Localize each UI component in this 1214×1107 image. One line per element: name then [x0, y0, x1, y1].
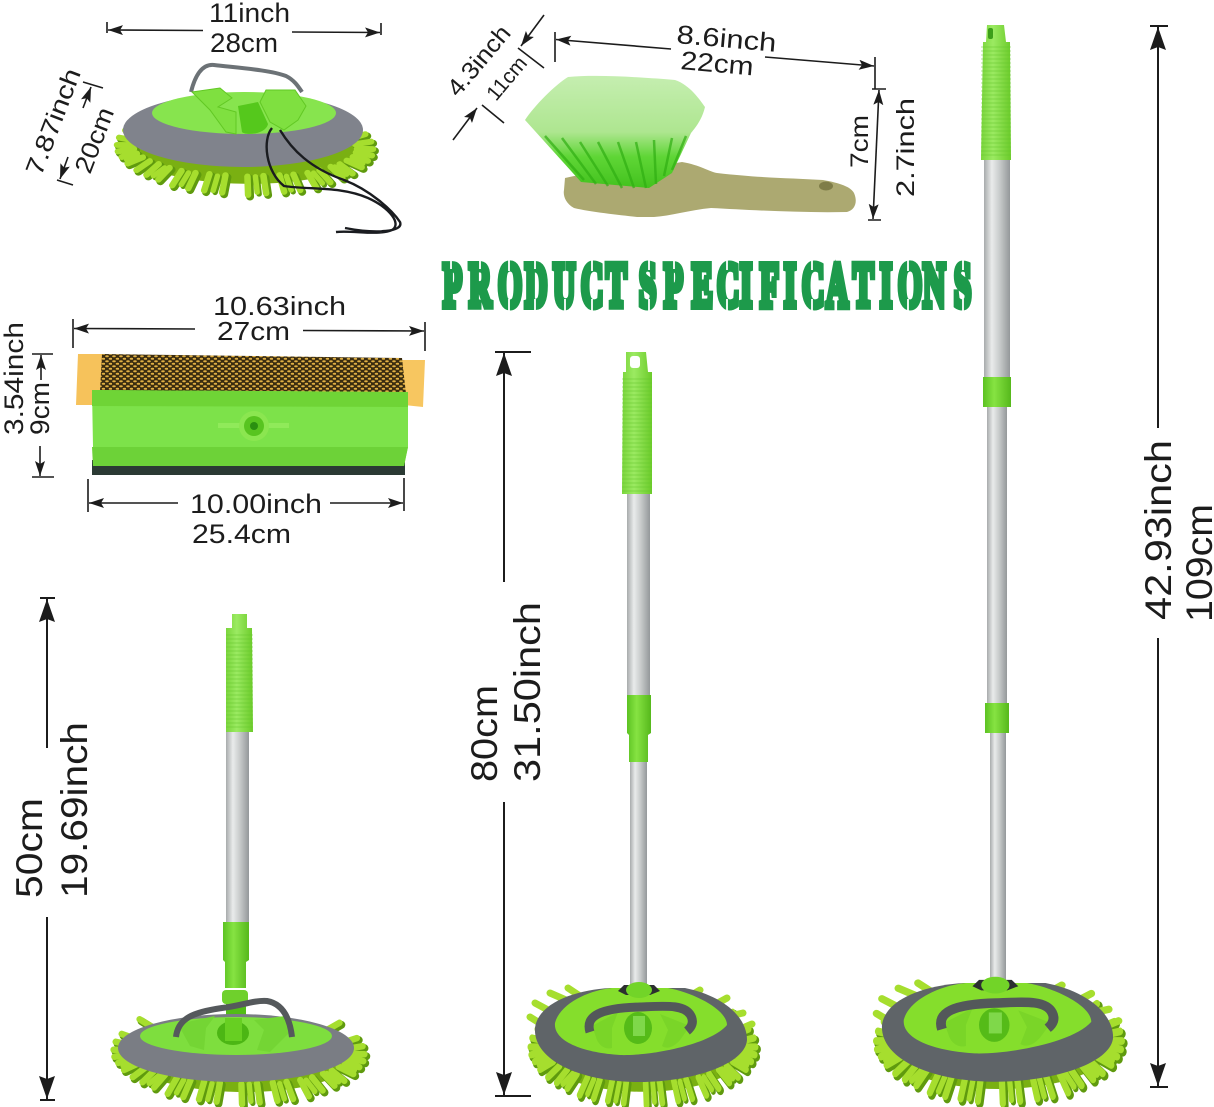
icon: socket stem: [225, 1018, 242, 1041]
icon: collar: [223, 922, 249, 988]
dimension: 80cm 31.50inch: 80cm: [464, 685, 505, 782]
icon: pole bottom: [990, 733, 1006, 985]
icon: green mop plate: [152, 92, 336, 134]
icon: pole lower: [630, 760, 647, 986]
icon: mop strap: [191, 65, 302, 92]
dimension: 4.3inch 11cm: [442, 15, 544, 140]
title: SPECIFICATIONS: [639, 250, 971, 320]
dimension: 50cm 19.69inch: 19.69inch: [54, 722, 95, 898]
title: [443, 250, 971, 320]
dimension: 50cm 19.69inch: 50cm: [9, 798, 50, 898]
icon: grey mop cover: [123, 93, 363, 167]
icon: mop head fringe: [116, 116, 376, 199]
icon: grip slot: [988, 28, 993, 39]
icon: handle hole: [819, 182, 833, 190]
icon: brush bristles: [525, 76, 705, 188]
icon: fringe: [530, 1012, 757, 1107]
icon: brush handle: [564, 162, 856, 217]
icon: fringe: [876, 1004, 1124, 1106]
dimension: 11inch 28cm: 28cm: [210, 28, 278, 58]
icon: body top shading: [92, 390, 408, 407]
dimension: 7.87inch 20cm: [20, 65, 120, 185]
dimension: 42.93inch 109cm: 42.93inch: [1138, 440, 1179, 620]
icon: connector knob: [218, 411, 289, 441]
icon: pole top: [984, 160, 1010, 378]
dimension: 50cm 19.69inch: [9, 598, 95, 1100]
icon: bristle streaks: [545, 136, 686, 188]
icon: mop socket: [238, 102, 268, 134]
dimension: 11inch 28cm: [107, 0, 381, 58]
dimension: 80cm 31.50inch: [464, 352, 548, 1096]
icon: mop head: [530, 982, 752, 1082]
dimension: 8.6inch 22cm: 22cm: [679, 45, 755, 81]
panel: squeegee head: [76, 354, 425, 475]
dimension: 7cm 2.7inch: [846, 89, 920, 220]
icon: right sponge: [400, 360, 425, 407]
dimension: 7cm 2.7inch: 2.7inch: [892, 98, 920, 197]
icon: pole silver: [226, 732, 249, 924]
icon: squeegee green body: [92, 390, 408, 466]
icon: grip: [622, 352, 652, 494]
icon: left sponge: [76, 354, 106, 405]
icon: clamps: [178, 1016, 292, 1052]
dimension: 42.93inch 109cm: [1138, 26, 1214, 1087]
dimension: 10.00inch 25.4cm: 10.00inch: [190, 489, 322, 519]
icon: squeegee rubber blade: [92, 460, 405, 475]
icon: grip: [226, 614, 253, 732]
icon: stem: [226, 1004, 246, 1044]
icon: pole middle: [987, 407, 1007, 704]
panel: long mop 109cm: [876, 25, 1124, 1106]
dimension: 7.87inch 20cm: 20cm: [69, 104, 120, 177]
dimension: 10.63inch 27cm: 10.63inch: [213, 291, 346, 321]
dimension: 8.6inch 22cm: [555, 19, 875, 89]
dimension: 7cm 2.7inch: 7cm: [846, 115, 874, 168]
dimension: 8.6inch 22cm: 8.6inch: [675, 19, 778, 58]
dimension: 10.63inch 27cm: [73, 291, 425, 351]
icon: socket: [217, 1021, 249, 1045]
dimension: 80cm 31.50inch: 31.50inch: [507, 602, 548, 782]
dimension: 10.00inch 25.4cm: 25.4cm: [192, 519, 291, 549]
icon: grip: [981, 25, 1011, 160]
icon: collar: [627, 695, 651, 762]
dimension: 10.63inch 27cm: 27cm: [217, 316, 290, 346]
icon: plate clamps: [192, 88, 306, 134]
icon: joint: [222, 990, 248, 1004]
panel: wheel brush: [525, 76, 856, 217]
icon: upper collar: [983, 377, 1011, 407]
dimension: 3.54inch 9cm: 9cm: [25, 382, 55, 435]
icon: grey cover: [118, 1014, 354, 1082]
icon: pole upper: [627, 494, 650, 696]
dimension: 4.3inch 11cm: 11cm: [482, 52, 532, 105]
icon: grip ridges: [226, 634, 253, 730]
icon: drawstring cord: [267, 128, 400, 233]
panel: short mop 50cm: [113, 614, 367, 1107]
icon: lower collar: [985, 703, 1009, 733]
icon: green plate: [140, 1017, 332, 1055]
icon: grip ridges: [981, 46, 1011, 158]
dimension: 7.87inch 20cm: 7.87inch: [20, 65, 87, 179]
icon: mesh pad: [100, 354, 406, 394]
dimension: 4.3inch 11cm: 4.3inch: [442, 20, 517, 102]
icon: fringe: [113, 1019, 367, 1107]
icon: body shading: [92, 447, 408, 466]
icon: grip ridges: [622, 378, 652, 492]
dimension: 10.00inch 25.4cm: [88, 478, 404, 549]
title: PRODUCT: [443, 250, 627, 320]
dimension: 3.54inch 9cm: [0, 322, 55, 477]
panel: top-left mop head: [116, 65, 400, 233]
icon: grip hole: [630, 356, 640, 368]
icon: strap: [176, 1001, 292, 1037]
icon: mop head: [877, 977, 1119, 1082]
panel: medium mop 80cm: [530, 352, 757, 1107]
